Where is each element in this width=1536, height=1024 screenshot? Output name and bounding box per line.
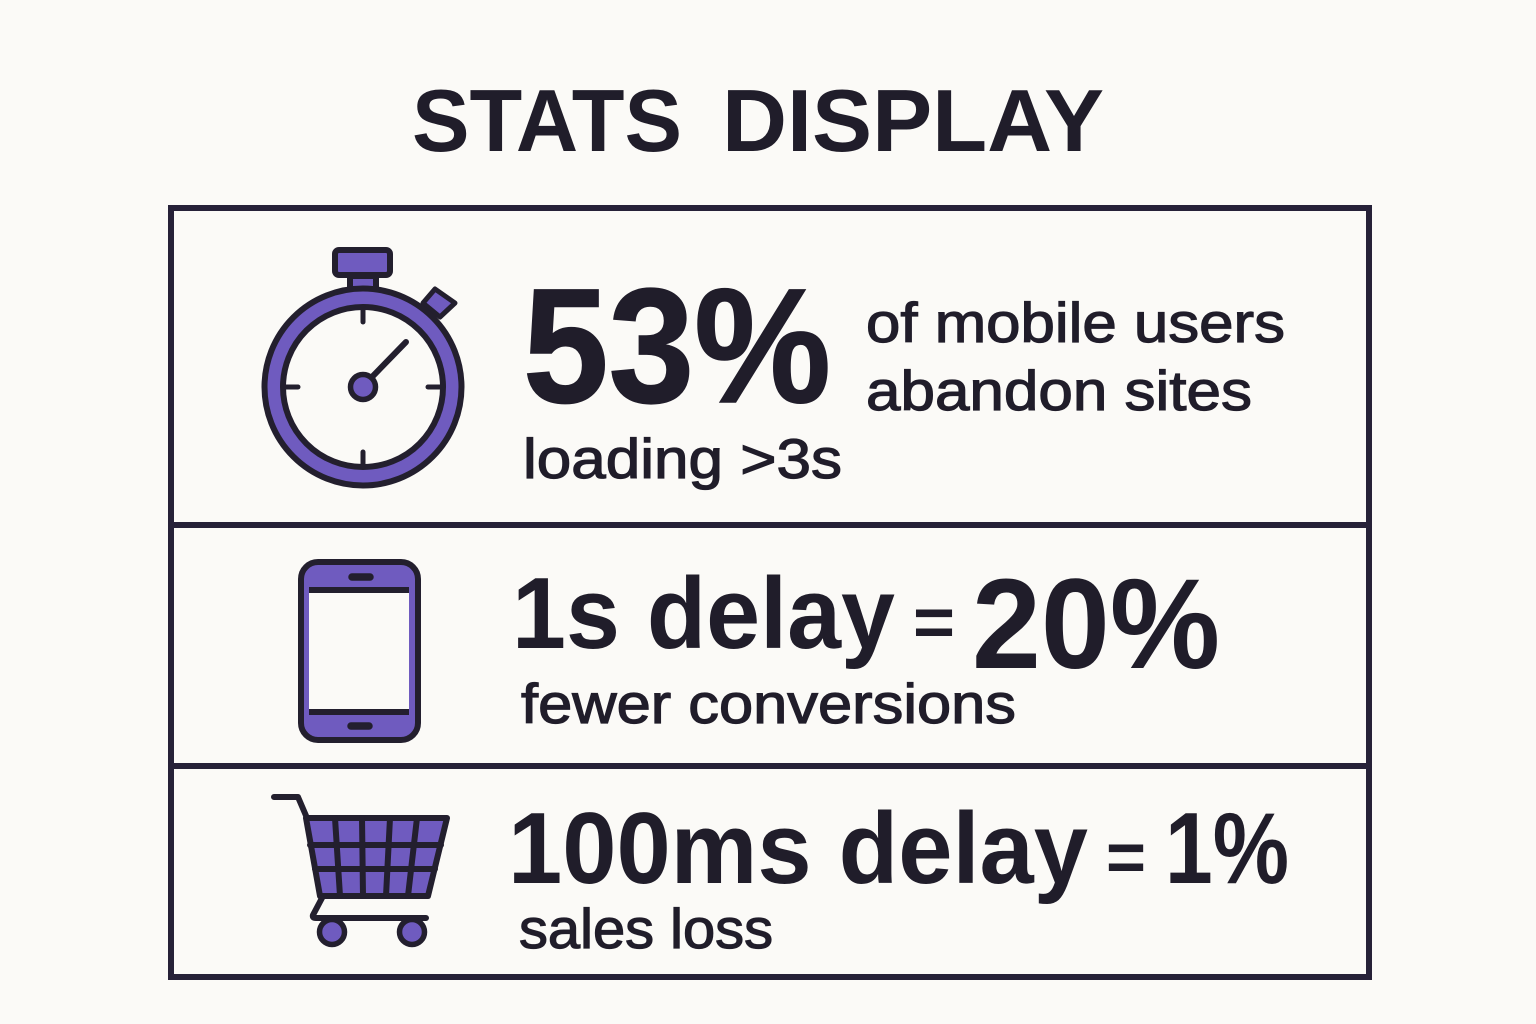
- icon: smartphone: [301, 562, 418, 740]
- equals sign: =: [1106, 818, 1146, 896]
- title: STATS: [412, 71, 682, 170]
- text: fewer conversions: fewer conversions: [521, 672, 1016, 735]
- panel: row 1, mobile abandonment: [264, 250, 1285, 490]
- panel: row 2, conversions: [301, 553, 1220, 740]
- panel: stats table: [171, 208, 1369, 977]
- title: DISPLAY: [722, 71, 1104, 170]
- title: [412, 71, 1104, 170]
- stat: 1s delay: 1s delay: [512, 558, 895, 670]
- equals sign: =: [913, 583, 955, 661]
- stat: 1%: 1%: [1165, 793, 1289, 905]
- text: abandon sites: abandon sites: [866, 359, 1252, 422]
- panel: row 3, sales: [274, 793, 1289, 960]
- icon: shopping cart: [274, 797, 447, 944]
- stat: 100ms delay: 100ms delay: [508, 793, 1088, 905]
- stat: 53%: 53%: [523, 254, 831, 437]
- icon: stopwatch: [264, 250, 462, 486]
- text: loading >3s: loading >3s: [523, 427, 842, 490]
- stat: 20%: 20%: [972, 553, 1220, 696]
- text: sales loss: sales loss: [519, 897, 773, 960]
- text: of mobile users: of mobile users: [866, 291, 1285, 354]
